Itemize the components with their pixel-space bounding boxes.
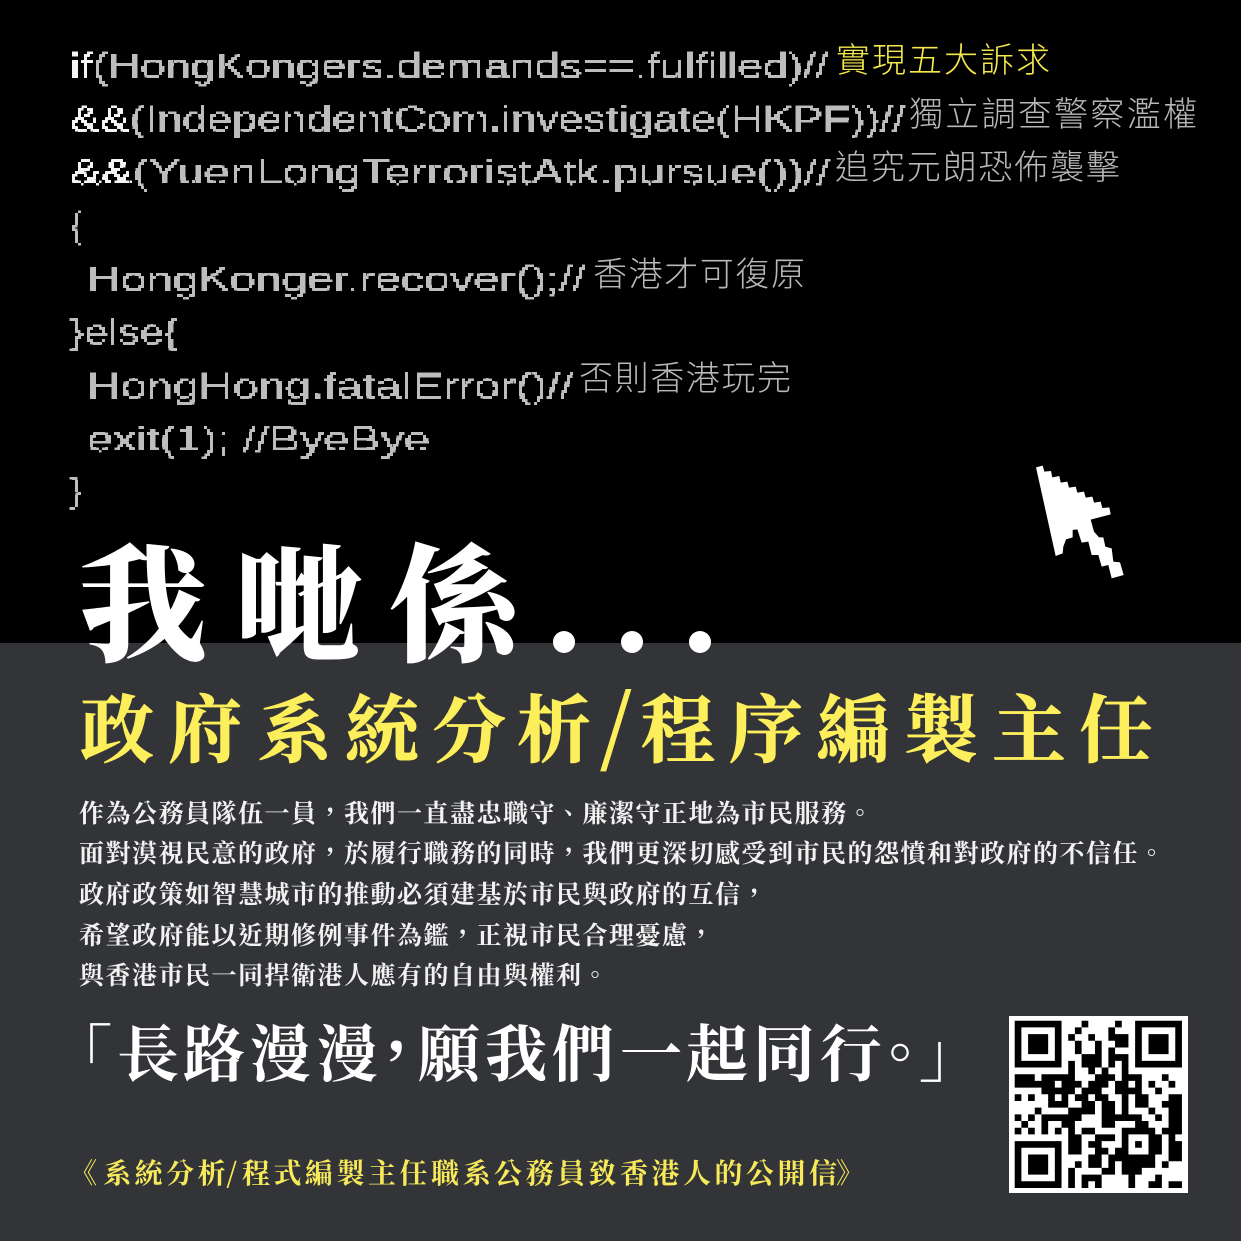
slogan: 「長路漫漫，願我們一起同行。」 [50,1005,981,1094]
title dots [553,631,711,653]
code brace open: { [70,206,82,245]
text block: statement [79,794,1166,992]
code line recover: HongKonger.recover();// [87,260,585,299]
code else: }else{ [70,313,178,352]
heading: job title: / [599,660,633,781]
text block: statement: 面對漠視民意的政府，於履行職務的同時，我們更深切感受到市民的怨憤和對政府的不信任。 [79,834,1166,870]
code line 1: if(HongKongers.demands==.fulfilled)// [70,47,828,86]
code brace close: } [70,471,82,510]
text block: statement: 政府政策如智慧城市的推動必須建基於市民與政府的互信， [79,875,768,911]
comment: independent investigation: 獨立調查警察濫權 [909,96,1197,134]
code line fatal error: HongHong.fatalError()// [87,367,573,406]
heading: job title: 政府系統分析 [80,672,591,778]
comment: game over: 否則香港玩完 [579,360,791,398]
heading: job title: 程序編製主任 [641,672,1153,778]
comment: recover: 香港才可復原 [593,256,805,294]
comment: five demands: 實現五大訴求 [836,42,1050,80]
title: we are: 我哋係 [79,504,528,688]
code line 3: && (YuenLongTerroristAtk.pursue())// [70,153,830,192]
text block: statement: 希望政府能以近期修例事件為鑑，正視市民合理憂慮， [79,916,715,952]
comment: Yuen Long attack: 追究元朗恐佈襲擊 [835,149,1120,187]
QR code [1009,1016,1188,1193]
code line 2: && (IndependentCom.investigate(HKPF))// [70,100,905,139]
open letter title: 《系統分析/程式編製主任職系公務員致香港人的公開信》 [69,1152,864,1192]
title: we are [79,504,711,688]
panel: pseudo-code block [70,42,1197,510]
heading: job title [80,660,1153,781]
icon: pixel mouse cursor [1036,466,1124,578]
code line exit: exit(1); //ByeBye [87,420,430,459]
text block: statement: 與香港市民一同捍衛港人應有的自由與權利。 [79,956,609,992]
text block: statement: 作為公務員隊伍一員，我們一直盡忠職守、廉潔守正地為市民服務。 [79,794,874,830]
